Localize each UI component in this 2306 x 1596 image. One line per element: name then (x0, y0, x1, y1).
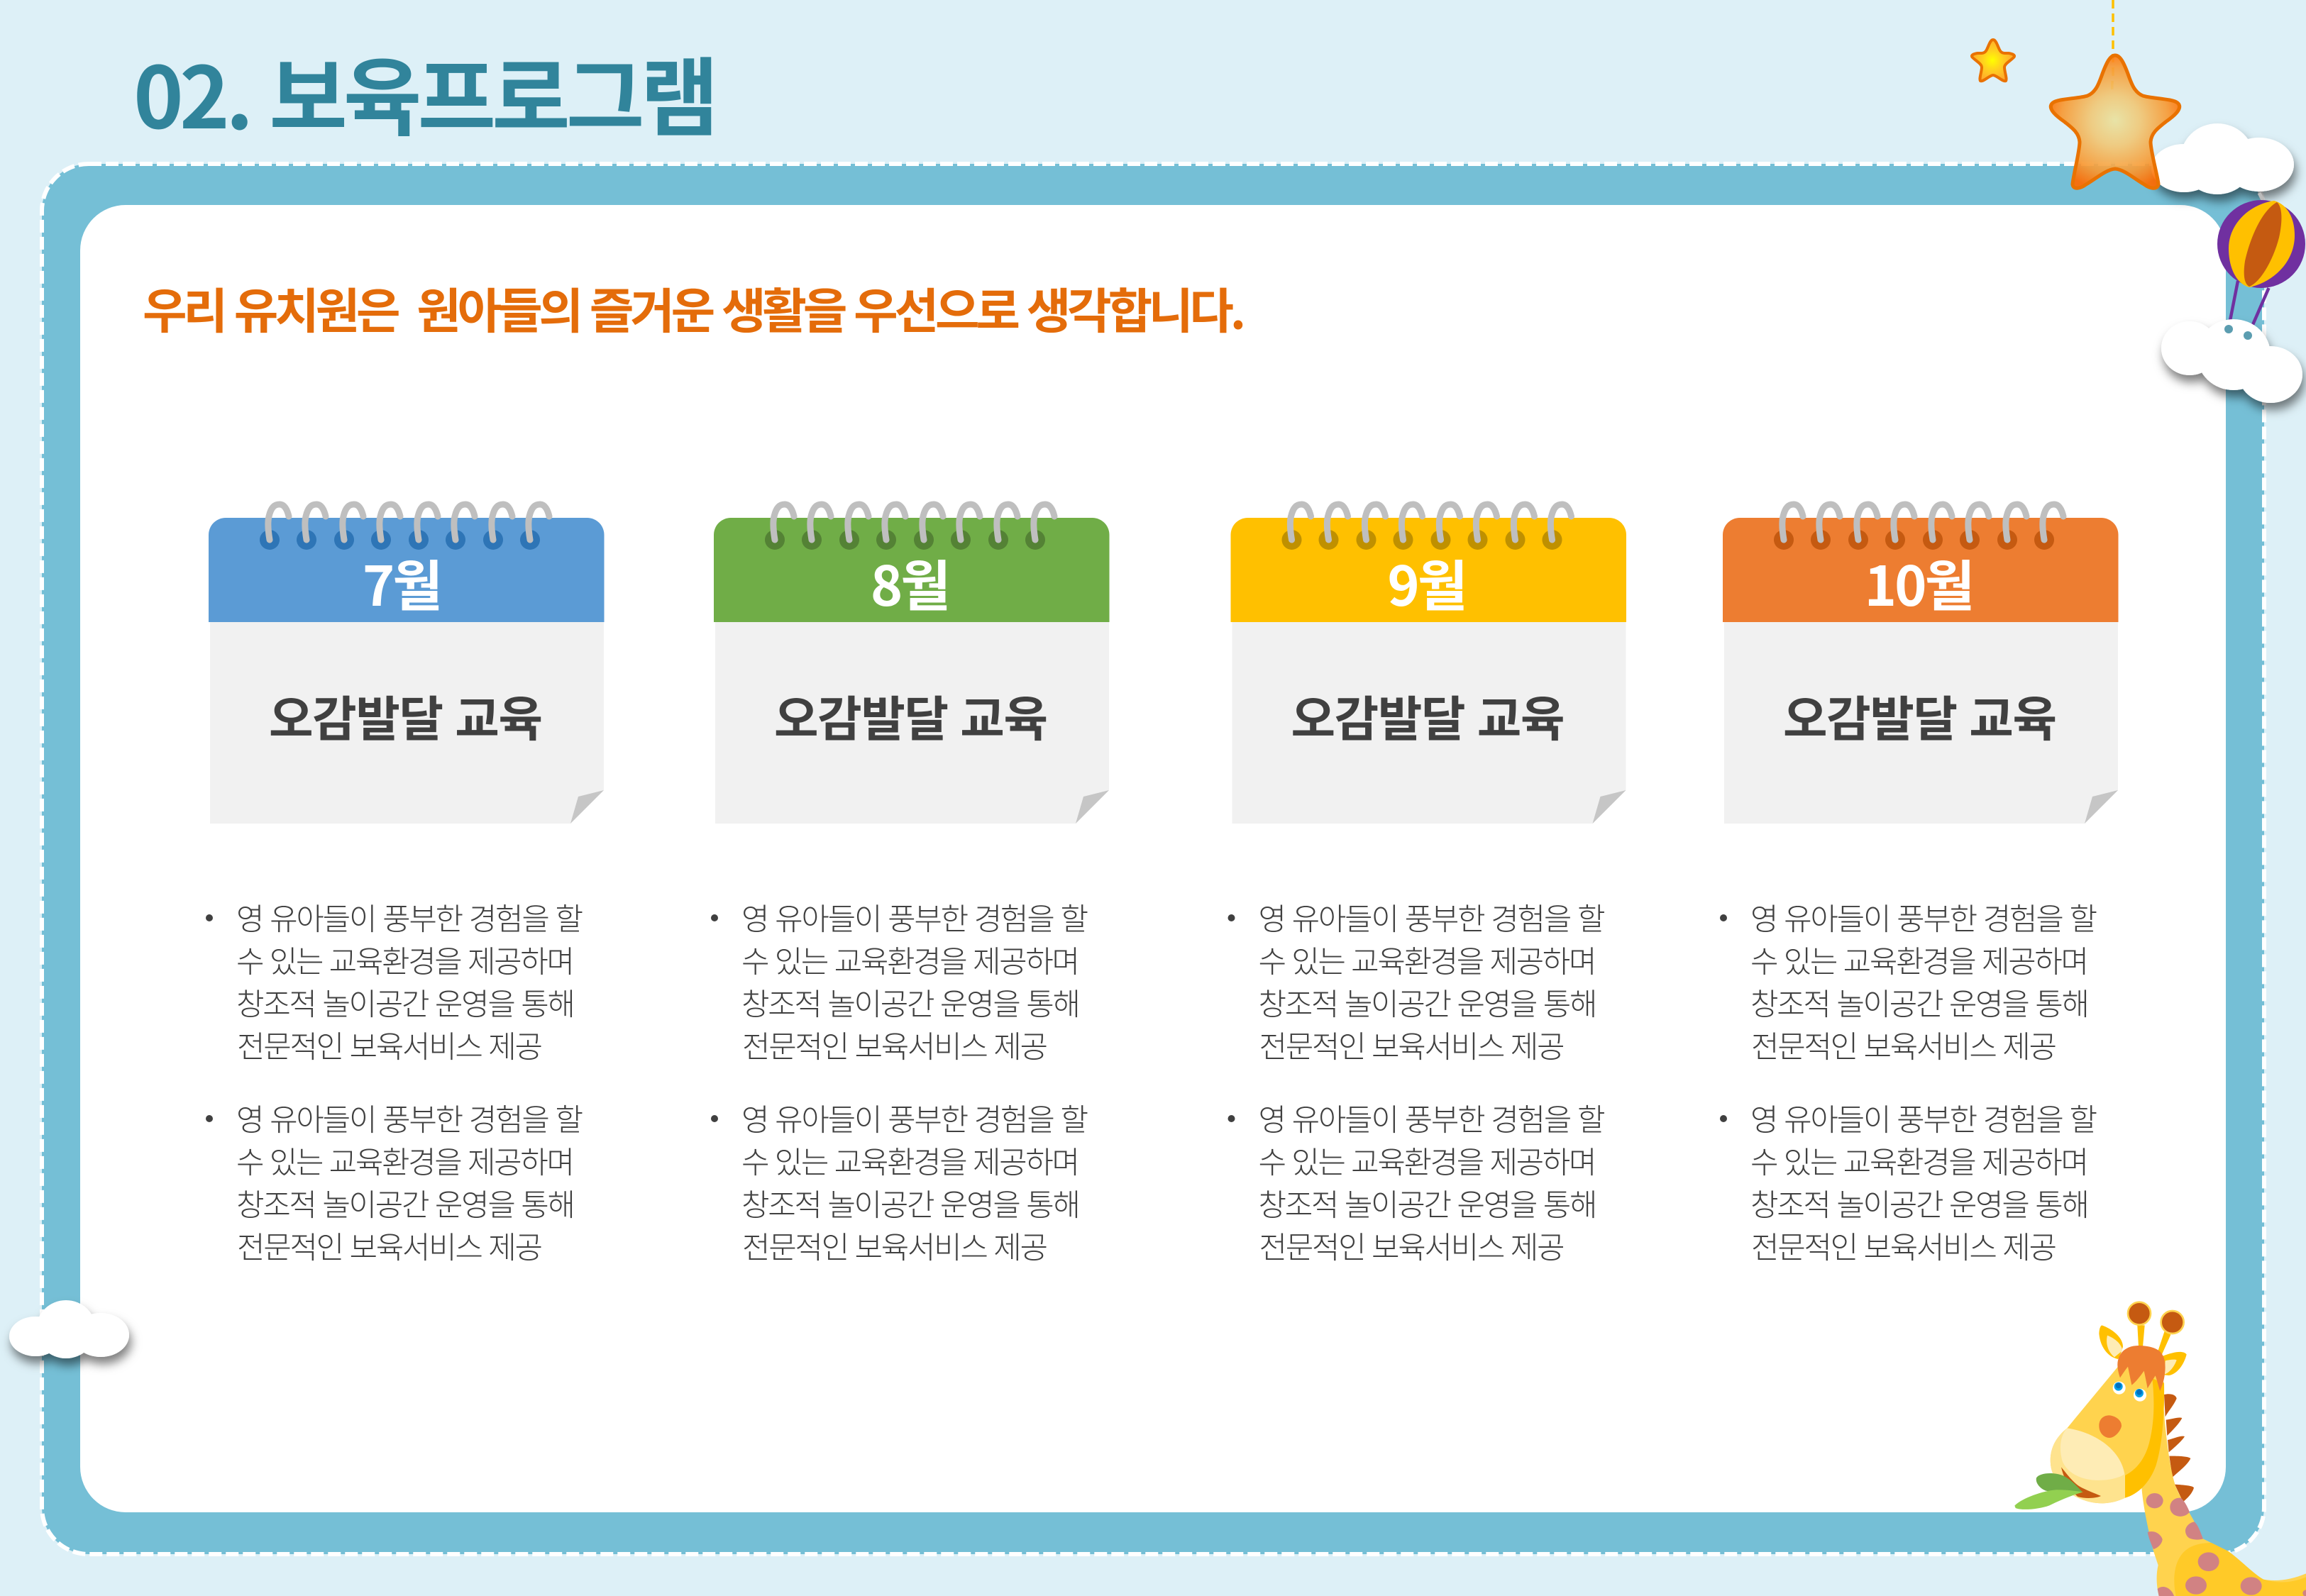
giraffe snout (2060, 1428, 2124, 1480)
giraffe nose (2099, 1415, 2122, 1438)
icon: dashed star string (2112, 0, 2113, 91)
icon: giraffe (2014, 1302, 2306, 1596)
bullet list (1720, 895, 2097, 1268)
title: 02. 보육프로그램 (133, 30, 719, 153)
bullet list: 전문적인 보육서비스 제공 (1751, 1023, 2057, 1067)
calendar column: August (711, 504, 1110, 1268)
binder holes (260, 530, 540, 550)
giraffe neck and body (2141, 1383, 2306, 1596)
bullet list: 창조적 놀이공간 운영을 통해 (1750, 980, 2090, 1024)
bullet list: 전문적인 보육서비스 제공 (742, 1224, 1048, 1268)
bullet list (206, 895, 583, 1268)
bullet list: 영 유아들이 풍부한 경험을 할 (1750, 1096, 2097, 1140)
calendar column: October (1720, 504, 2119, 1268)
bullet list: 영 유아들이 풍부한 경험을 할 (236, 895, 583, 939)
bullet list: 창조적 놀이공간 운영을 통해 (236, 980, 575, 1024)
bullet list: 수 있는 교육환경을 제공하며 (741, 938, 1080, 982)
giraffe hair (2117, 1346, 2166, 1391)
giraffe mane (2164, 1394, 2194, 1502)
giraffe head shade (2125, 1378, 2164, 1498)
giraffe left ear (2099, 1325, 2123, 1359)
month label: 9월 (1387, 543, 1466, 622)
bullet list: 영 유아들이 풍부한 경험을 할 (741, 1096, 1088, 1140)
bullet list: 수 있는 교육환경을 제공하며 (1259, 938, 1596, 982)
binder rings (1782, 504, 2063, 540)
giraffe head (2051, 1355, 2164, 1503)
binder rings (1290, 504, 1571, 540)
binder holes (765, 530, 1045, 550)
calendar page (715, 622, 1109, 824)
calendar page (1724, 622, 2118, 824)
bullet list: 전문적인 보육서비스 제공 (742, 1023, 1048, 1067)
month label: 8월 (871, 543, 949, 622)
calendar header (1230, 518, 1626, 622)
card heading: 오감발달 교육 (1291, 680, 1565, 750)
page curl (2085, 790, 2118, 824)
calendar header (209, 518, 605, 622)
bullet list (711, 895, 1088, 1268)
giraffe lower jaw (2051, 1428, 2125, 1503)
bullet list: 창조적 놀이공간 운영을 통해 (1750, 1181, 2090, 1225)
giraffe spots (2146, 1493, 2306, 1596)
bullet list: 전문적인 보육서비스 제공 (1259, 1023, 1565, 1067)
card heading: 오감발달 교육 (1783, 680, 2057, 750)
giraffe body shade (2174, 1543, 2306, 1596)
bullet list: 전문적인 보육서비스 제공 (237, 1023, 543, 1067)
bullet list: 수 있는 교육환경을 제공하며 (236, 1138, 575, 1182)
icon: cloud top right (2151, 123, 2294, 194)
calendar column: September (1228, 504, 1626, 1268)
bullet list: 창조적 놀이공간 운영을 통해 (236, 1181, 575, 1225)
bullet list: 영 유아들이 풍부한 경험을 할 (1259, 895, 1605, 939)
bullet list: 영 유아들이 풍부한 경험을 할 (1750, 895, 2097, 939)
bullet list: 창조적 놀이공간 운영을 통해 (741, 980, 1081, 1024)
bullet list: 전문적인 보육서비스 제공 (237, 1224, 543, 1268)
icon: balloon (2217, 193, 2305, 326)
calendar header (1723, 518, 2119, 622)
bullet list: 창조적 놀이공간 운영을 통해 (1259, 1181, 1598, 1225)
bullet list: 전문적인 보육서비스 제공 (1259, 1224, 1565, 1268)
bullet list: 영 유아들이 풍부한 경험을 할 (236, 1096, 583, 1140)
page curl (570, 790, 604, 824)
icon: cloud lower left (9, 1300, 129, 1358)
panel: white content area (80, 205, 2226, 1512)
month label: 10월 (1865, 543, 1973, 622)
giraffe leaves (2036, 1473, 2082, 1492)
bullet list: 수 있는 교육환경을 제공하며 (741, 1138, 1080, 1182)
bullet list: 수 있는 교육환경을 제공하며 (1750, 938, 2089, 982)
giraffe horns (2137, 1325, 2145, 1347)
icon: small star (1972, 40, 2014, 81)
bullet list: 수 있는 교육환경을 제공하며 (236, 938, 575, 982)
giraffe right ear (2163, 1352, 2187, 1375)
bullet list (1228, 895, 1605, 1268)
icon: cloud with basket dots (2161, 319, 2302, 403)
card heading: 오감발달 교육 (774, 680, 1048, 750)
giraffe eyes (2113, 1382, 2146, 1402)
binder holes (1774, 530, 2054, 550)
bullet list: 영 유아들이 풍부한 경험을 할 (741, 895, 1088, 939)
bullet list: 영 유아들이 풍부한 경험을 할 (1259, 1096, 1605, 1140)
binder holes (1281, 530, 1562, 550)
calendar header (714, 518, 1110, 622)
bullet list: 수 있는 교육환경을 제공하며 (1259, 1138, 1596, 1182)
bullet list: 전문적인 보육서비스 제공 (1751, 1224, 2057, 1268)
month label: 7월 (363, 543, 441, 622)
calendar page (1232, 622, 1626, 824)
page curl (1076, 790, 1109, 824)
binder rings (773, 504, 1054, 540)
binder rings (268, 504, 549, 540)
card heading: 오감발달 교육 (269, 680, 543, 750)
bullet list: 수 있는 교육환경을 제공하며 (1750, 1138, 2089, 1182)
subtitle: 우리 유치원은 원아들의 즐거운 생활을 우선으로 생각합니다. (143, 272, 1246, 343)
giraffe mouth (2061, 1467, 2101, 1498)
calendar page (210, 622, 604, 824)
bullet list: 창조적 놀이공간 운영을 통해 (1259, 980, 1598, 1024)
calendar column: July (206, 504, 605, 1268)
bullet list: 창조적 놀이공간 운영을 통해 (741, 1181, 1081, 1225)
icon: large star (2051, 55, 2180, 188)
page curl (1592, 790, 1626, 824)
